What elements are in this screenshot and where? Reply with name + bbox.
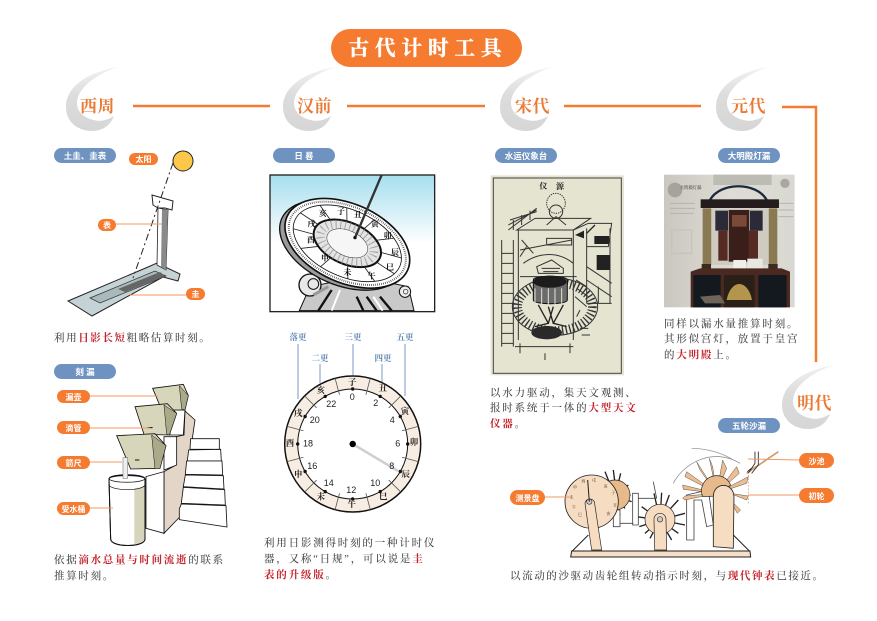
- illustration: sundial: 卯: [384, 230, 392, 240]
- illustration: sand clock: 酉: [581, 477, 585, 483]
- illustration: sand clock: 午: [572, 503, 576, 509]
- era: 西周: 西周: [80, 97, 115, 116]
- panel: 五轮沙漏: [510, 418, 834, 582]
- illustration: dial diagram: 五更: [396, 332, 414, 342]
- text: 大明殿灯漏说明: 的大明殿上。: [664, 350, 738, 361]
- text: 日晷说明: 器，又称“日规”，可以说是圭: [264, 554, 425, 565]
- text: 刻漏说明: 推算时刻。: [54, 569, 115, 582]
- illustration: sundial: 辰: [391, 247, 399, 257]
- illustration: sand clock: 寅: [606, 510, 611, 516]
- illustration: sundial: 申: [321, 253, 329, 263]
- illustration: gnomon: 圭: [192, 289, 200, 299]
- text: 日晷说明: 表的升级版。: [264, 570, 338, 581]
- tag: 日晷: [273, 148, 335, 163]
- illustration: sundial: 亥: [319, 208, 327, 218]
- callouts: sand clock: 沙池: [808, 456, 824, 466]
- era: 西周: [66, 67, 118, 131]
- illustration: sundial: 巳: [386, 263, 394, 272]
- tag: 刻漏: [54, 364, 116, 379]
- tag: 刻漏: 刻 漏: [75, 367, 95, 377]
- panel: 水运仪象台: [490, 148, 638, 430]
- text: 水运仪象台说明: 报时系统于一体的大型天文: [490, 403, 638, 414]
- panel: 日晷: [264, 148, 436, 581]
- text: 土圭说明: 利用日影长短粗略估算时刻。: [54, 331, 211, 344]
- illustration: lamp clock photo: 大明殿灯漏: [680, 184, 702, 191]
- tag: 大明殿灯漏: [718, 148, 780, 163]
- illustration: sundial: 酉: [307, 235, 315, 245]
- callouts: sand clock: 测景盘: [516, 493, 540, 503]
- illustration: dial diagram: 卯: [410, 437, 419, 447]
- illustration: dial diagram: 20: [310, 415, 320, 425]
- era: 元代: [716, 67, 768, 131]
- illustration: dial diagram: 未: [316, 492, 325, 502]
- illustration: dial diagram: 4: [390, 415, 395, 425]
- illustration: dial diagram: 四更: [374, 353, 392, 363]
- callouts: sand clock: [510, 453, 834, 505]
- illustration: sundial: 午: [368, 270, 376, 280]
- era: 明代: [782, 365, 834, 429]
- illustration: dial diagram: 10: [370, 478, 380, 488]
- illustration: sand clock: 亥: [604, 482, 608, 488]
- text: 五轮沙漏说明: 以流动的沙驱动齿轮组转动指示时刻，与现代钟表已接近。: [510, 569, 825, 582]
- illustration: sand clock: 申: [573, 483, 577, 489]
- panel: 刻漏: [54, 364, 227, 582]
- illustration: dial diagram: 丑: [378, 383, 387, 393]
- era: 汉前: 汉前: [297, 97, 332, 116]
- title: 古代计时工具: [348, 37, 508, 60]
- illustration: dial diagram: 午: [347, 499, 356, 509]
- illustration: dial diagram: 14: [324, 478, 334, 488]
- illustration: dial diagram: [285, 332, 421, 512]
- illustration: dial diagram: 22: [326, 399, 336, 409]
- illustration: dial diagram: 8: [389, 461, 394, 471]
- illustration: dial diagram: 戌: [294, 408, 303, 418]
- illustration: water clock: [109, 384, 227, 545]
- illustration: armillary clock tower woodcut: [491, 175, 624, 375]
- era: 元代: 元代: [731, 97, 766, 116]
- illustration: dial diagram: 二更: [311, 353, 329, 363]
- era: 汉前: [283, 67, 335, 131]
- illustration: sand clock: 子: [611, 489, 615, 495]
- era: 宋代: 宋代: [515, 97, 550, 116]
- tag: 水运仪象台: 水运仪象台: [505, 151, 547, 161]
- tag: 五轮沙漏: 五轮沙漏: [732, 421, 766, 431]
- illustration: lamp clock photo: [664, 175, 795, 307]
- callouts: water clock: [57, 390, 158, 515]
- illustration: dial diagram: 落更: [289, 332, 307, 342]
- illustration: gnomon: 太阳: [136, 154, 152, 164]
- illustration: dial diagram: 三更: [344, 332, 362, 342]
- text: 大明殿灯漏说明: 其形似宫灯，放置于皇宫: [664, 332, 799, 345]
- callouts: water clock: 受水桶: [62, 504, 86, 514]
- illustration: sundial: 丑: [354, 210, 362, 219]
- illustration: sundial: 子: [337, 207, 345, 216]
- callouts: water clock: 漏壶: [66, 392, 82, 402]
- illustration: dial diagram: 16: [307, 461, 317, 471]
- callouts: sand clock: 初轮: [808, 491, 824, 501]
- tag: 日晷: 日 晷: [294, 151, 314, 161]
- illustration: sand clock: 戌: [592, 476, 596, 482]
- panel: 大明殿灯漏: [664, 148, 799, 361]
- illustration: dial diagram: 18: [303, 438, 313, 448]
- illustration: armillary clock tower woodcut: 仪源: [539, 181, 573, 191]
- illustration: dial diagram: 酉: [286, 438, 295, 448]
- tag: 五轮沙漏: [718, 418, 780, 433]
- text: 刻漏说明: 依据滴水总量与时间流逝的联系: [54, 555, 225, 566]
- illustration: sand clock: [565, 448, 778, 557]
- illustration: sundial: 戌: [308, 219, 316, 229]
- illustration: dial diagram: 0: [350, 392, 355, 402]
- illustration: dial diagram: 申: [294, 469, 303, 479]
- illustration: sundial: 未: [343, 267, 351, 277]
- illustration: dial diagram: 寅: [401, 406, 411, 416]
- timeline connector: [133, 106, 816, 362]
- callouts: water clock: 箭尺: [66, 458, 82, 468]
- illustration: dial diagram: 亥: [316, 385, 325, 395]
- panel: 土圭: [54, 148, 211, 344]
- illustration: gnomon: [68, 151, 205, 316]
- illustration: dial diagram: 12: [346, 485, 356, 495]
- illustration: dial diagram: 巳: [379, 492, 388, 502]
- illustration: sundial: [266, 175, 435, 312]
- illustration: sand clock: 丑: [613, 502, 617, 508]
- callouts: water clock: 滴管: [66, 423, 82, 433]
- illustration: sundial: 寅: [371, 219, 380, 229]
- text: 水运仪象台说明: 仪器。: [490, 419, 527, 430]
- title: [331, 29, 522, 67]
- illustration: dial diagram: 6: [395, 438, 400, 448]
- illustration: dial diagram: 子: [348, 377, 357, 387]
- illustration: sand clock: 未: [569, 493, 573, 499]
- illustration: dial diagram: 2: [373, 398, 378, 408]
- text: 日晷说明: 利用日影测得时刻的一种计时仪: [264, 536, 436, 549]
- era: 明代: 明代: [797, 394, 832, 413]
- illustration: dial diagram: 辰: [401, 469, 410, 479]
- tag: 土圭、圭表: 土圭、圭表: [64, 151, 107, 161]
- illustration: gnomon: 表: [103, 220, 111, 230]
- illustration: sand clock: 巳: [578, 511, 582, 517]
- text: 水运仪象台说明: 以水力驱动，集天文观测、: [490, 386, 638, 399]
- text: 大明殿灯漏说明: 同样以漏水量推算时刻。: [664, 317, 799, 330]
- tag: 水运仪象台: [495, 148, 557, 163]
- era: 宋代: [500, 67, 552, 131]
- tag: 大明殿灯漏: 大明殿灯漏: [728, 151, 771, 161]
- tag: 土圭、圭表: [54, 148, 116, 163]
